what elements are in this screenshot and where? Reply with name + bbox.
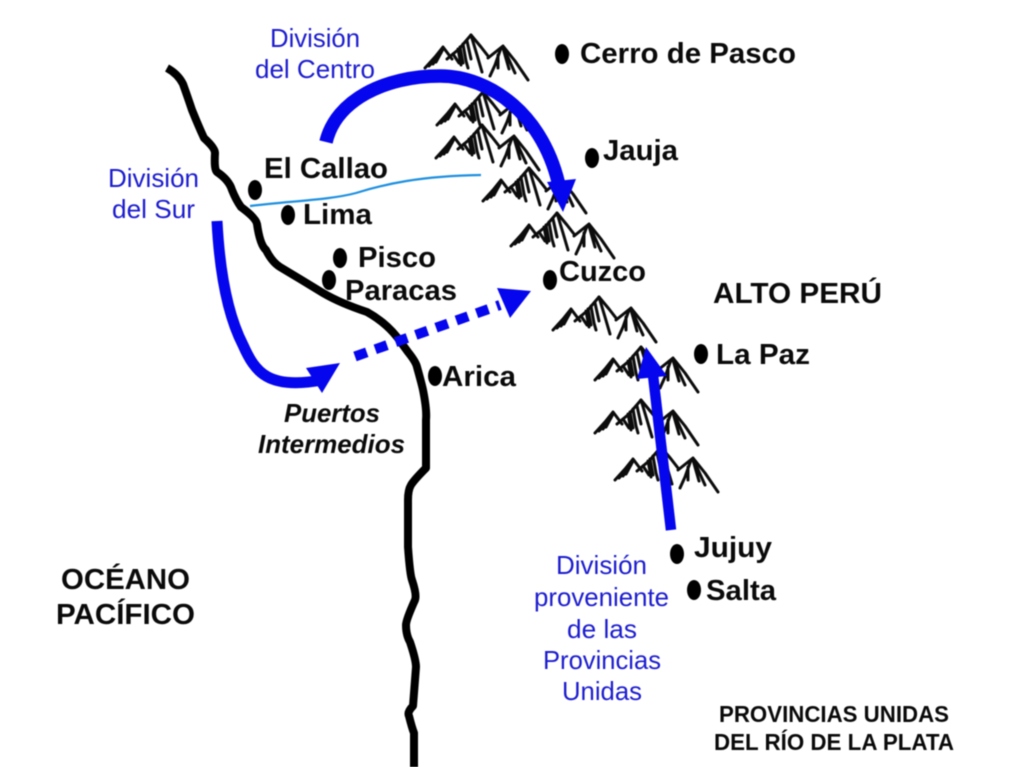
- dashed arrow: towards Cuzco: [355, 288, 531, 356]
- label: División del Centro: [255, 23, 375, 84]
- label: División proveniente de las Provincias Unidas: [534, 550, 669, 706]
- label: Océano Pacífico: [56, 562, 195, 631]
- city labels: El Callao: [264, 153, 388, 185]
- label: Océano Pacífico: OCÉANO: [61, 562, 190, 596]
- label: Provincias Unidas del Río de la Plata: [714, 701, 954, 755]
- label: División proveniente de las Provincias Unidas: de las: [567, 614, 637, 644]
- label: División del Centro: División: [270, 23, 360, 53]
- city labels: Cerro de Pasco: [580, 38, 796, 70]
- city labels: Jauja: [603, 135, 679, 167]
- label: División del Sur: [108, 163, 199, 224]
- city labels: Arica: [442, 361, 517, 393]
- label: Puertos Intermedios: Intermedios: [258, 429, 405, 459]
- label: Océano Pacífico: PACÍFICO: [56, 597, 195, 631]
- label: División proveniente de las Provincias Unidas: División: [556, 550, 647, 580]
- city labels: Pisco: [358, 242, 436, 274]
- label: División proveniente de las Provincias Unidas: proveniente: [534, 582, 669, 612]
- arrow: División del Sur: [217, 221, 340, 393]
- arrow: División del Centro: [326, 76, 576, 212]
- city labels: La Paz: [716, 339, 810, 371]
- label: Alto Perú: ALTO PERÚ: [713, 276, 882, 310]
- city labels: Salta: [706, 575, 777, 607]
- city labels: [264, 38, 810, 607]
- city labels: Paracas: [345, 275, 457, 307]
- river: [250, 175, 481, 206]
- city dots: [248, 44, 708, 600]
- city labels: Jujuy: [694, 532, 772, 564]
- mountain range: [425, 35, 718, 492]
- label: División proveniente de las Provincias Unidas: Provincias: [543, 645, 661, 675]
- label: División proveniente de las Provincias Unidas: Unidas: [562, 676, 642, 706]
- coastline: [167, 68, 426, 767]
- arrow: División de las Provincias Unidas: [637, 347, 671, 530]
- label: División del Sur: División: [108, 163, 199, 193]
- label: Provincias Unidas del Río de la Plata: PROVINCIAS UNIDAS: [719, 701, 949, 727]
- label: División del Centro: del Centro: [255, 54, 375, 84]
- city labels: Cuzco: [559, 256, 646, 288]
- label: Provincias Unidas del Río de la Plata: DEL RÍO DE LA PLATA: [714, 728, 954, 755]
- label: Puertos Intermedios: Puertos: [284, 398, 380, 428]
- label: División del Sur: del Sur: [112, 194, 195, 224]
- label: Puertos Intermedios: [258, 398, 405, 459]
- city labels: Lima: [303, 199, 373, 231]
